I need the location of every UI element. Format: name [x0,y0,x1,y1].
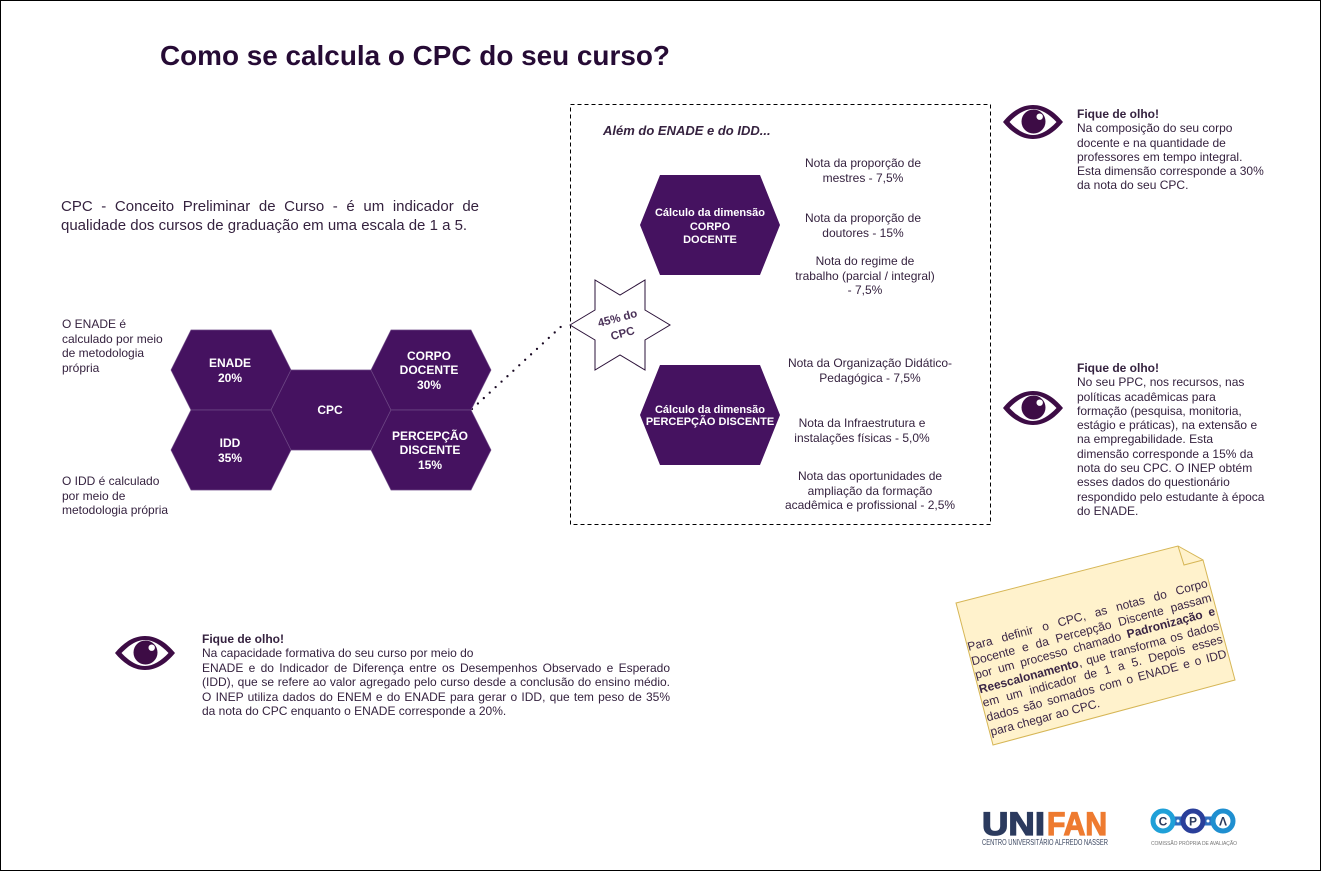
callout: ENADE e IDD: (IDD), que se refere ao valor agregado pelo curso desde a conclusão do ensino médio. [202,675,670,689]
logo: UNIFAN: UNI [982,806,1045,842]
intro text [61,198,479,234]
hexagon: Percepção Discente: 15% [418,458,442,472]
logo: CPA [1151,811,1237,847]
callout: percepção discente: políticas acadêmicas para [1077,390,1216,404]
sticky note text: Reescalonamento, que transforma os dados [977,618,1220,696]
sticky note [956,546,1235,745]
item: mestres: mestres - 7,5% [823,171,903,185]
callout: percepção discente: No seu PPC, nos recursos, nas [1077,375,1244,389]
star badge: 45% do CPC: CPC [609,325,636,343]
item: regime de trabalho: - 7,5% [848,283,882,297]
hexagon: Percepção Discente: DISCENTE [400,443,460,457]
sticky note text: em um indicador de 1 a 5. Depois esses [981,632,1224,710]
intro text: CPC - Conceito Preliminar de Curso - é um indicador de [61,198,479,215]
hexagon: IDD: 35% [218,451,242,465]
icon: eye top right [1003,105,1063,139]
hexagon: Percepção Discente: PERCEPÇÃO [392,428,468,443]
callout: ENADE e IDD: ENADE e do Indicador de Diferença entre os Desempenhos Observado e Esperado [202,661,670,675]
callout: percepção discente: esses dados do questionário [1077,475,1230,489]
hexagon: ENADE [171,330,291,410]
item: organização didático-pedagógica [788,356,952,385]
hexagon group: CPC composition [171,330,491,490]
logo: UNIFAN: FAN [1047,806,1107,842]
item: infraestrutura: instalações físicas - 5,0% [794,431,930,445]
callout: corpo docente: Esta dimensão corresponde a 30% [1077,164,1264,178]
hexagon: CPC [271,370,391,450]
callout: ENADE e IDD: da nota do CPC enquanto o ENADE corresponde a 20%. [202,704,506,718]
sticky note text: para chegar ao CPC. [989,696,1101,738]
item: oportunidades [785,469,955,512]
logo: CPA: P [1189,814,1197,828]
item: oportunidades: ampliação da formação [808,484,932,498]
item: doutores: Nota da proporção de [805,211,921,225]
sticky note text [966,576,1228,738]
note: IDD: metodologia própria [62,503,168,517]
note: ENADE: própria [62,361,99,375]
logo: CPA: COMISSÃO PRÓPRIA DE AVALIAÇÃO [1151,840,1237,847]
item: infraestrutura: Nota da Infraestrutura e [799,416,925,430]
logo: CPA: C [1159,814,1168,828]
sticky note text: por um processo chamado Padronização e [973,604,1217,682]
note: IDD: O IDD é calculado [62,474,159,488]
hexagon: Percepção Discente [371,410,491,490]
hexagon: cálculo percepção discente [640,365,780,465]
star badge: 45% do CPC: 45% do [597,308,639,330]
callout: percepção discente: Fique de olho! [1077,361,1159,375]
callout: percepção discente: estágio e práticas), na extensão e [1077,418,1257,432]
hexagon: Corpo Docente: DOCENTE [400,363,458,377]
callout: ENADE e IDD: O INEP utiliza dados do ENEM e do ENADE para gerar o IDD, que tem peso de 35% [202,690,670,704]
item: doutores [805,211,921,240]
hexagon: cálculo corpo docente: DOCENTE [683,234,737,246]
item: doutores: doutores - 15% [822,226,904,240]
note: IDD [62,474,168,517]
callout: percepção discente: nota do seu CPC. O INEP obtém [1077,461,1252,475]
sticky note text: dados são somados com o ENADE e o IDD [985,647,1228,724]
item: mestres: Nota da proporção de [805,156,921,170]
callout: corpo docente: professores em tempo integral. [1077,150,1242,164]
item: regime de trabalho [795,254,935,297]
hexagon: cálculo percepção discente: Cálculo da dimensão [655,404,765,416]
item: oportunidades: acadêmica e profissional - 2,5% [785,498,955,512]
heading: além do ENADE: Além do ENADE e do IDD... [603,123,771,138]
note: ENADE: de metodologia [62,346,144,360]
hexagon: ENADE: 20% [218,371,242,385]
dotted connector line [472,322,566,409]
callout: percepção discente: do ENADE. [1077,504,1138,518]
callout: percepção discente: respondido pelo estudante à época [1077,490,1264,504]
callout: corpo docente: da nota do seu CPC. [1077,178,1188,192]
icon: eye middle right [1003,391,1063,425]
callout: ENADE e IDD [202,632,670,718]
callout: percepção discente [1077,361,1264,518]
callout: corpo docente: docente e na quantidade de [1077,136,1226,150]
hexagon: IDD: IDD [220,436,241,450]
callout: ENADE e IDD: Na capacidade formativa do seu curso por meio do [202,646,473,660]
hexagon: cálculo corpo docente [640,175,780,275]
sticky note text: Para definir o CPC, as notas do Corpo [966,576,1209,654]
item: organização didático-pedagógica: Pedagógica - 7,5% [819,371,921,385]
callout: percepção discente: dimensão corresponde a 15% da [1077,447,1253,461]
hexagon: cálculo percepção discente: PERCEPÇÃO DISCENTE [646,415,774,428]
item: oportunidades: Nota das oportunidades de [798,469,942,483]
hexagon: cálculo corpo docente: CORPO [690,221,731,233]
item: mestres [805,156,921,185]
callout: percepção discente: formação (pesquisa, monitoria, [1077,404,1242,418]
item: organização didático-pedagógica: Nota da Organização Didático- [788,356,952,370]
hexagon: Corpo Docente [371,330,491,410]
callout: percepção discente: na empregabilidade. Esta [1077,432,1213,446]
hexagon: cálculo corpo docente: Cálculo da dimensão [655,207,765,219]
item: infraestrutura [794,416,930,445]
logo: UNIFAN [982,806,1108,847]
star badge: 45% do CPC [570,280,670,370]
callout: corpo docente: Fique de olho! [1077,107,1159,121]
icon: eye bottom left [115,636,175,670]
hexagon: Corpo Docente: 30% [417,378,441,392]
note: IDD: por meio de [62,489,125,503]
callout: ENADE e IDD: Fique de olho! [202,632,284,646]
note: ENADE [62,317,163,375]
callout: corpo docente: Na composição do seu corpo [1077,121,1232,135]
intro text: qualidade dos cursos de graduação em uma escala de 1 a 5. [61,217,467,234]
logo: UNIFAN: CENTRO UNIVERSITÁRIO ALFREDO NASSER [982,838,1108,847]
sticky note text: Docente e da Percepção Discente passam [970,590,1213,668]
callout: corpo docente [1077,107,1264,192]
note: ENADE: O ENADE é [62,317,126,331]
dashed box: além do ENADE e do IDD [570,104,990,524]
hexagon: IDD [171,410,291,490]
item: regime de trabalho: trabalho (parcial / integral) [795,269,935,283]
logo: CPA: Λ [1219,814,1227,828]
item: regime de trabalho: Nota do regime de [816,254,914,268]
note: ENADE: calculado por meio [62,332,163,346]
title: Como se calcula o CPC do seu curso? [160,40,670,71]
hexagon: ENADE: ENADE [209,356,251,370]
hexagon: Corpo Docente: CORPO [407,349,451,363]
hexagon: CPC: CPC [317,403,343,417]
